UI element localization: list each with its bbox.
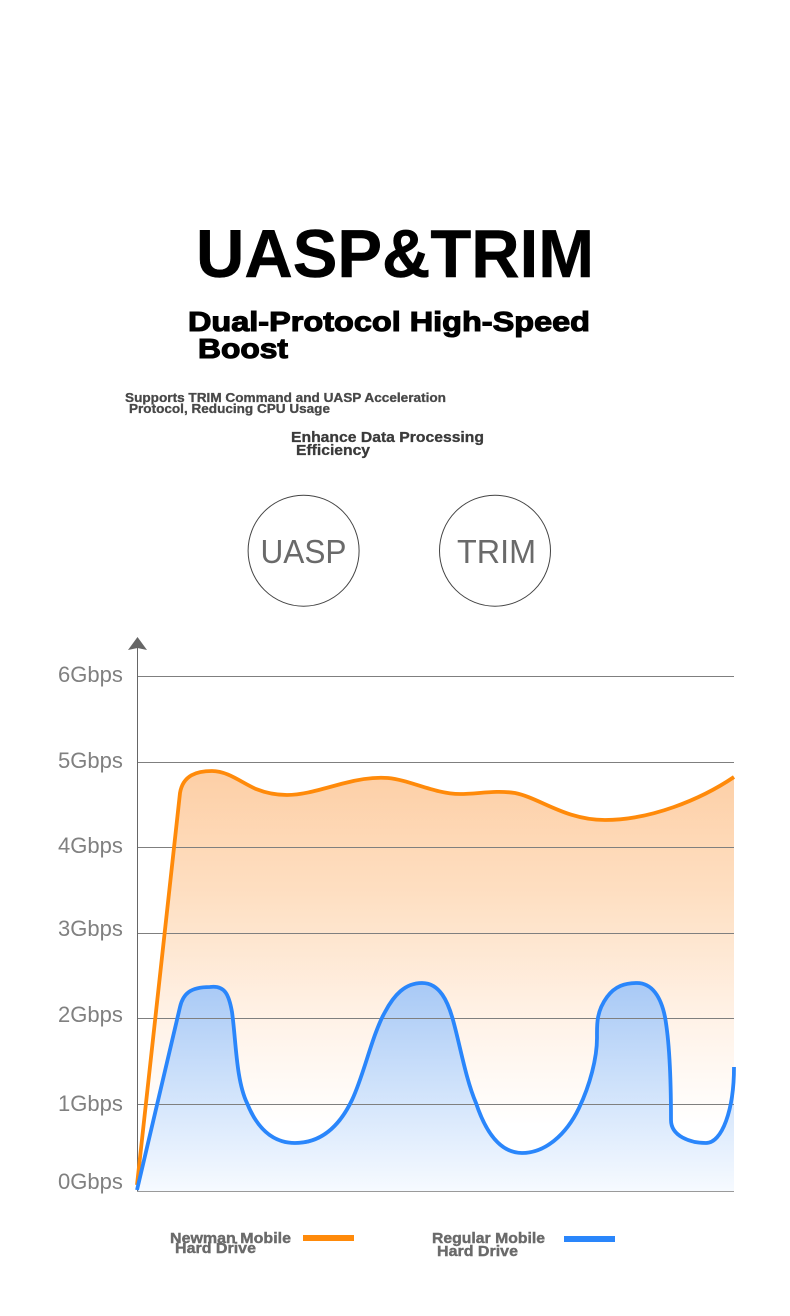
- blue area fill: [137, 983, 734, 1191]
- grid lines: [137, 676, 734, 1192]
- legend: Newman Mobile Hard Drive: [170, 1230, 354, 1257]
- y axis labels: 4Gbps: [58, 833, 123, 858]
- y axis with arrow: [128, 637, 147, 1191]
- legend: Regular Mobile Hard Drive: Regular Mobile: [432, 1230, 545, 1247]
- subtitle: [188, 306, 590, 364]
- badge: TRIM: [440, 495, 550, 606]
- y axis labels: 5Gbps: [58, 748, 123, 773]
- legend: Newman Mobile Hard Drive: Hard Drive: [175, 1240, 256, 1257]
- blue line: regular drive: [137, 983, 734, 1190]
- y axis labels: 3Gbps: [58, 916, 123, 941]
- y axis labels: [58, 662, 123, 1194]
- description: data processing efficiency: Enhance Data Processing: [291, 430, 484, 446]
- y axis labels: 2Gbps: [58, 1002, 123, 1027]
- y axis labels: 6Gbps: [58, 662, 123, 687]
- badge: UASP: [248, 495, 359, 606]
- orange area fill: [137, 771, 734, 1191]
- badge: TRIM: TRIM: [457, 533, 536, 570]
- description: data processing efficiency: Efficiency: [296, 443, 370, 459]
- badge: UASP: UASP: [260, 533, 346, 570]
- description: TRIM and UASP support: [125, 390, 446, 416]
- y axis labels: 1Gbps: [58, 1091, 123, 1116]
- orange line: Newman drive: [137, 771, 734, 1185]
- speed chart: [58, 637, 734, 1194]
- subtitle: Boost: [198, 333, 288, 364]
- description: TRIM and UASP support: Supports TRIM Command and UASP Acceleration: [125, 390, 446, 405]
- legend: Newman Mobile Hard Drive: Newman Mobile: [170, 1230, 291, 1247]
- legend: Regular Mobile Hard Drive: [432, 1230, 615, 1260]
- description: TRIM and UASP support: Protocol, Reducing CPU Usage: [129, 401, 330, 416]
- description: data processing efficiency: [291, 430, 484, 459]
- title: UASP&TRIM: [196, 216, 594, 292]
- subtitle: Dual-Protocol High-Speed: [188, 306, 590, 337]
- legend: Regular Mobile Hard Drive: Hard Drive: [437, 1243, 518, 1260]
- y axis labels: 0Gbps: [58, 1169, 123, 1194]
